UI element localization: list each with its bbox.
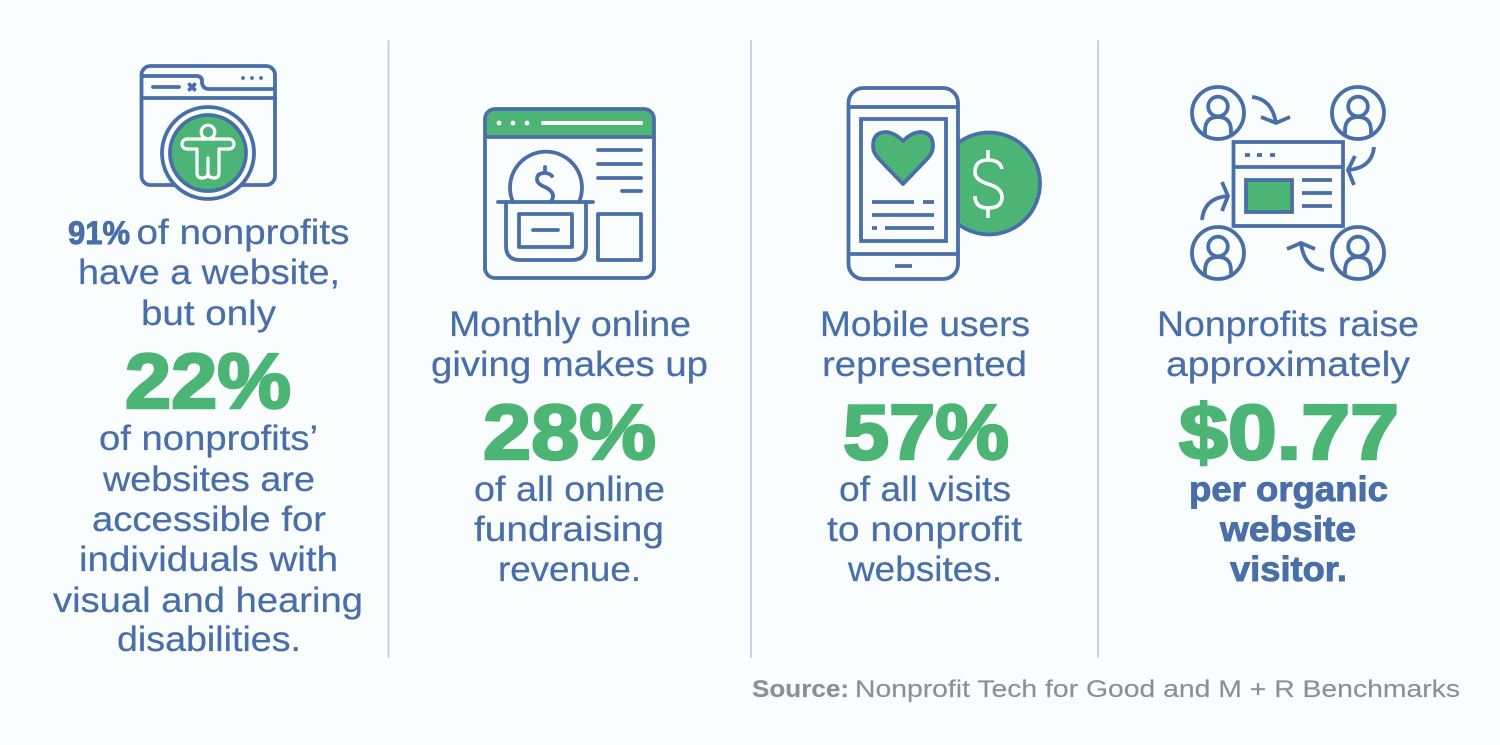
icon: users around a web page: [1192, 87, 1384, 279]
text: organic visitors lead-in: approximately: [1166, 345, 1411, 384]
text: 91 percent statement: but only: [141, 294, 277, 333]
text: 22 percent description: visual and hearing: [53, 581, 363, 620]
source note: Source:: [752, 676, 849, 703]
text: 91 percent statement: [68, 213, 350, 333]
statistic: $0.77: $0.77: [1179, 388, 1399, 476]
text: monthly giving description: fundraising: [474, 510, 664, 549]
text: per organic website visitor: per organic: [1189, 470, 1388, 509]
text: mobile users lead-in: Mobile users: [820, 305, 1030, 344]
icon: accessible website window: [142, 66, 275, 199]
text: mobile users description: websites.: [847, 550, 1002, 589]
text: 22 percent description: accessible for: [92, 500, 326, 539]
text: per organic website visitor: visitor.: [1230, 550, 1347, 589]
text: monthly giving description: [474, 470, 665, 589]
panel: website accessibility: [53, 66, 363, 659]
icon: phone with heart and dollar coin: [848, 88, 1040, 279]
text: monthly giving description: of all online: [474, 470, 665, 509]
text: organic visitors lead-in: [1157, 305, 1419, 384]
panel: mobile users: [820, 88, 1040, 589]
text: monthly giving lead-in: [431, 305, 708, 384]
text: 22 percent description: individuals with: [79, 540, 338, 579]
text: mobile users description: of all visits: [839, 470, 1011, 509]
text: 91 percent statement: of nonprofits: [136, 213, 350, 252]
text: 22 percent description: disabilities.: [117, 620, 301, 659]
source note: Nonprofit Tech for Good and M + R Benchmarks: [855, 676, 1460, 703]
text: 91 percent statement: 91%: [68, 215, 130, 251]
text: 22 percent description: of nonprofits’: [99, 419, 318, 458]
text: mobile users description: to nonprofit: [827, 510, 1022, 549]
text: monthly giving description: revenue.: [498, 550, 641, 589]
text: per organic website visitor: website: [1219, 510, 1356, 549]
text: 22 percent description: [53, 419, 363, 659]
text: monthly giving lead-in: Monthly online: [449, 305, 691, 344]
text: mobile users description: [827, 470, 1022, 589]
statistic: 57%: 57%: [843, 388, 1009, 476]
statistic: 22%: 22%: [125, 337, 291, 425]
text: monthly giving lead-in: giving makes up: [431, 345, 708, 384]
text: mobile users lead-in: [820, 305, 1030, 384]
icon: donation web page: [485, 109, 654, 278]
text: 22 percent description: websites are: [102, 460, 315, 499]
statistic: 28%: 28%: [483, 388, 656, 476]
text: 91 percent statement: have a website,: [78, 253, 340, 292]
text: mobile users lead-in: represented: [822, 345, 1027, 384]
text: organic visitors lead-in: Nonprofits raise: [1157, 305, 1419, 344]
panel: organic visitors: [1157, 87, 1419, 589]
text: per organic website visitor: [1189, 470, 1388, 589]
panel: monthly giving: [431, 109, 708, 589]
